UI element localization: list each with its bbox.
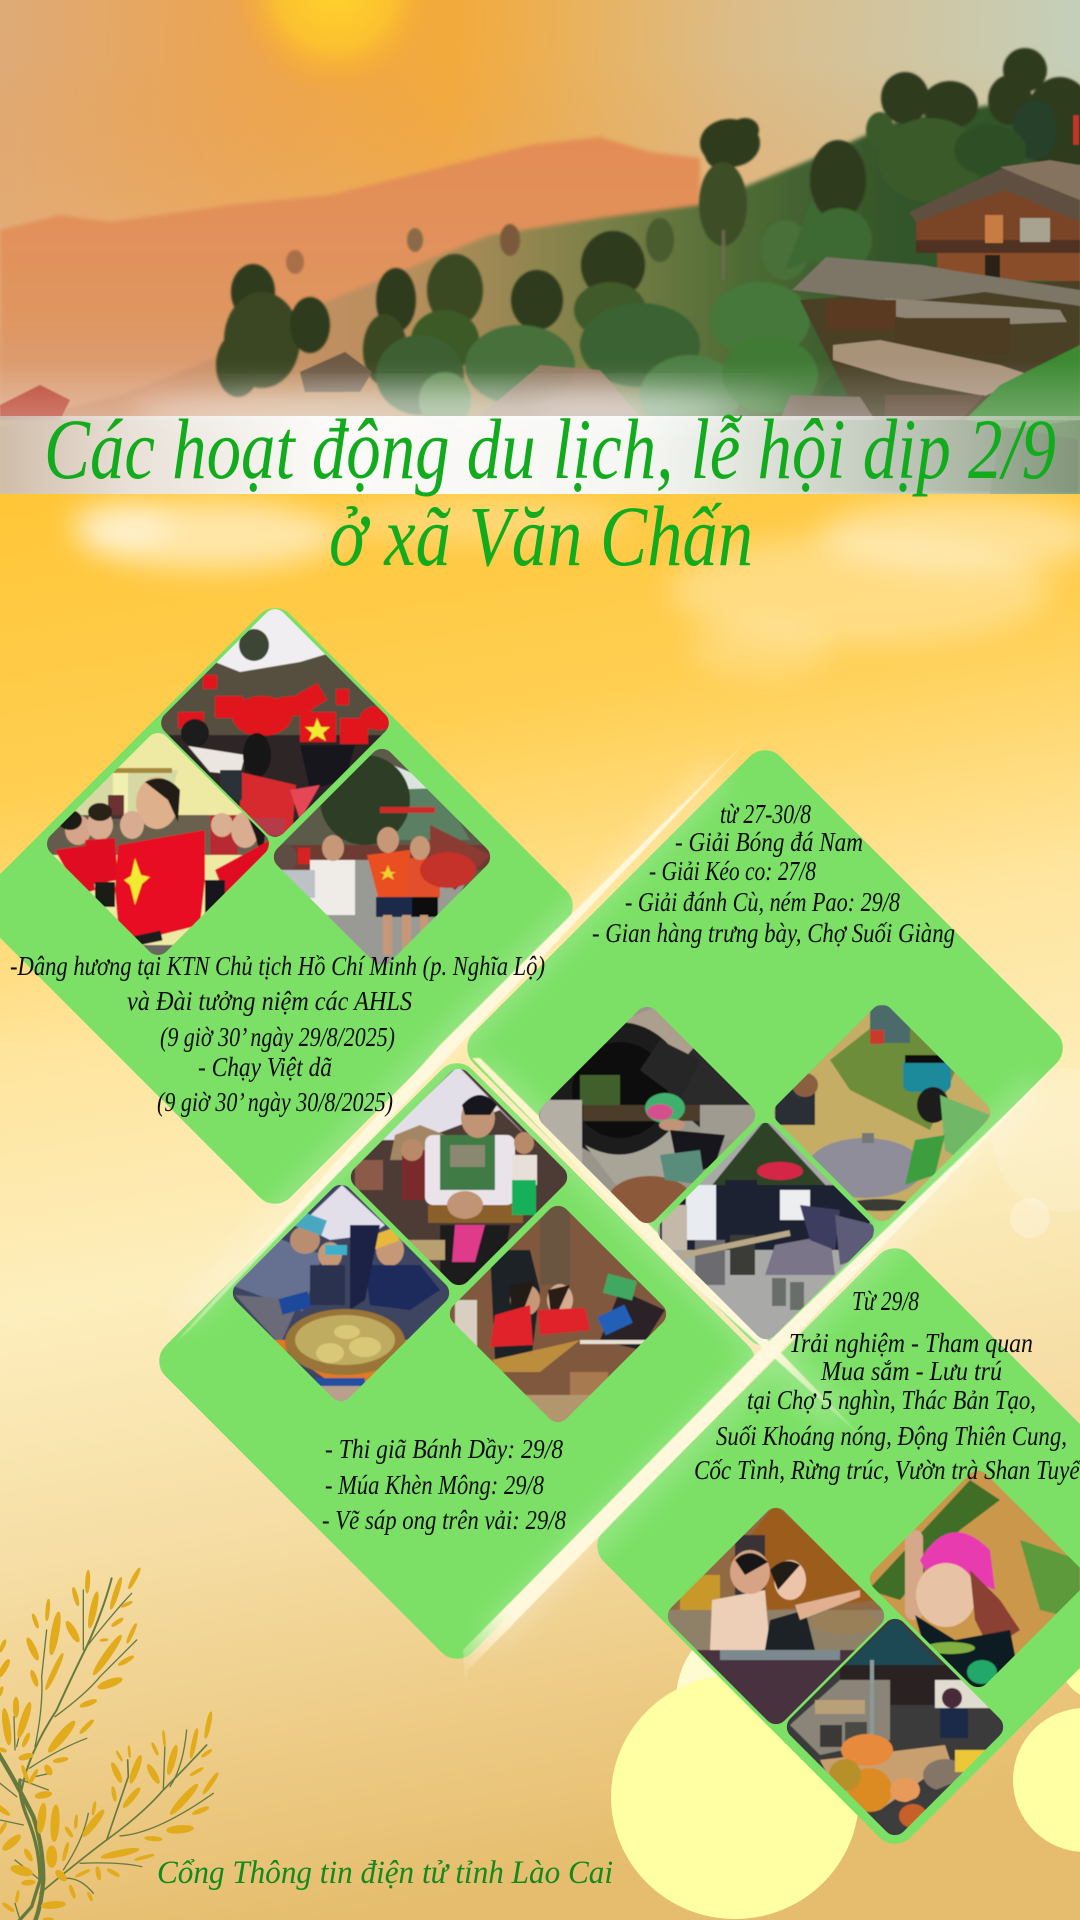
photo: man playing khene — [350, 1068, 568, 1286]
trees — [216, 48, 1080, 435]
light streaks — [176, 730, 1062, 1692]
text block: sports tournaments: - Gian hàng trưng bày, Chợ Suối Giàng — [592, 918, 955, 948]
photo: tug of war — [658, 1122, 874, 1340]
text block: experiences from 29/8: tại Chợ 5 nghìn, Thác Bản Tạo, — [747, 1385, 1036, 1415]
text block: experiences from 29/8: Trải nghiệm - Tham quan — [789, 1328, 1033, 1358]
panel: green diamonds — [0, 599, 1080, 1853]
icon: golden flowering branches — [0, 1567, 220, 1920]
footer credit: Cổng Thông tin điện tử tỉnh Lào Cai — [157, 1855, 613, 1891]
text block: cultural activities: - Vẽ sáp ong trên vải: 29/8 — [322, 1505, 566, 1535]
text block: incense offering and cross-country run: -Dâng hương tại KTN Chủ tịch Hồ Chí Minh (p. Nghĩa Lộ) — [10, 951, 545, 981]
bokeh circles — [611, 1068, 1080, 1919]
photo: woman stirring wok — [770, 1000, 995, 1225]
text block: sports tournaments — [592, 799, 955, 948]
text block: incense offering and cross-country run — [10, 951, 545, 1117]
photo: girls in red shirts at table — [445, 1205, 670, 1430]
text block: cultural activities: - Thi giã Bánh Dầy: 29/8 — [325, 1434, 563, 1464]
text block: experiences from 29/8: Mua sắm - Lưu trú — [820, 1356, 1002, 1386]
text block: experiences from 29/8: Từ 29/8 — [852, 1286, 919, 1316]
text block: experiences from 29/8 — [694, 1286, 1080, 1485]
text block: cultural activities: - Múa Khèn Mông: 29/8 — [325, 1470, 544, 1500]
text block: incense offering and cross-country run: - Chạy Việt dã — [198, 1052, 332, 1082]
photo: market stall — [780, 1615, 1010, 1840]
photo: runners — [270, 745, 500, 965]
title — [44, 401, 1056, 584]
photo: crowd waving flags — [161, 609, 389, 837]
photo: pounding sticky rice cakes — [230, 1180, 455, 1406]
text block: sports tournaments: từ 27-30/8 — [720, 799, 811, 829]
photo: man in red star shirt — [47, 733, 269, 955]
title: ở xã Văn Chấn — [329, 488, 753, 584]
text block: sports tournaments: - Giải đánh Cù, ném Pao: 29/8 — [625, 887, 900, 917]
photo: smiling woman in pink scarf — [865, 1465, 1080, 1700]
text block: cultural activities — [322, 1434, 566, 1535]
text block: sports tournaments: - Giải Bóng đá Nam — [675, 827, 863, 857]
text block: incense offering and cross-country run: và Đài tưởng niệm các AHLS — [127, 986, 412, 1016]
clouds — [70, 499, 1080, 678]
text block: sports tournaments: - Giải Kéo co: 27/8 — [649, 856, 816, 886]
photo: couple in hot spring — [668, 1508, 884, 1724]
text block: incense offering and cross-country run: (9 giờ 30’ ngày 30/8/2025) — [157, 1087, 393, 1117]
hero photo: mountain village at sunset — [0, 0, 1080, 494]
text block: incense offering and cross-country run: (9 giờ 30’ ngày 29/8/2025) — [160, 1022, 395, 1052]
village houses — [0, 115, 1080, 440]
photo: tea drying drum — [538, 1006, 756, 1224]
